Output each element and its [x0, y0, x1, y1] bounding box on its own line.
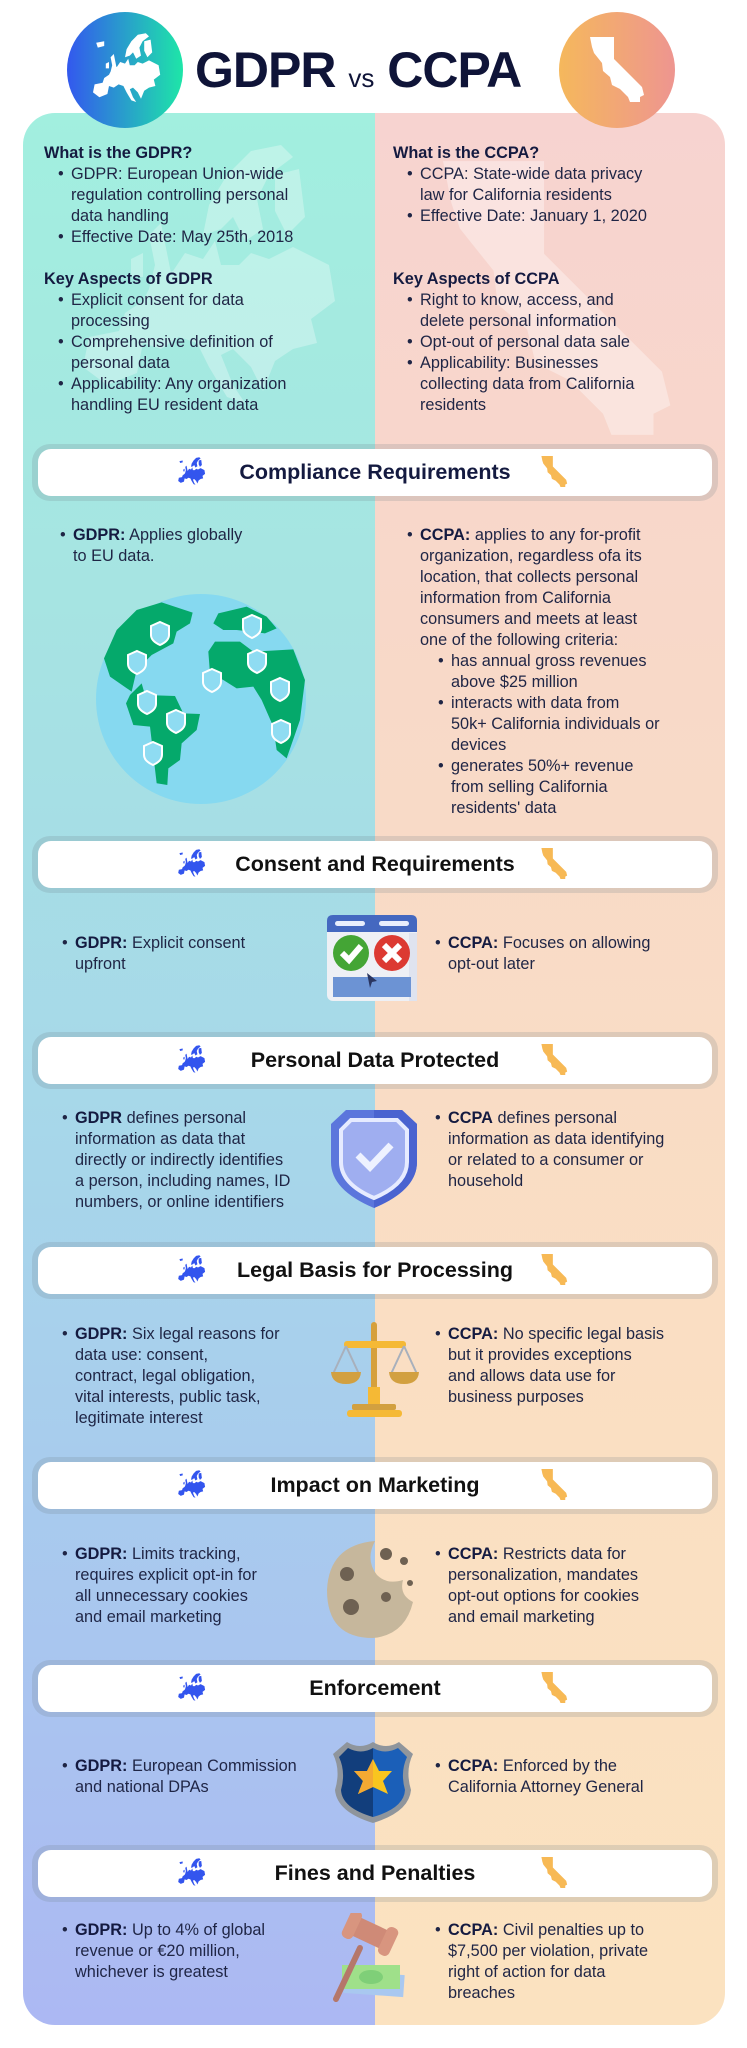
text: what is GDPR: GDPR: European Union-wide: [71, 165, 284, 183]
text: what is CCPA: Effective Date: January 1, 2020: [420, 207, 647, 225]
text: CCPA legal basis: and allows data use for: [448, 1367, 615, 1385]
text: CCPA compliance: 50k+ California individuals or: [451, 715, 660, 733]
text: CCPA fines: breaches: [448, 1984, 515, 2002]
text: GDPR compliance: [60, 526, 242, 565]
text: CCPA compliance: from selling California: [451, 778, 608, 796]
text: CCPA compliance: one of the following criteria:: [420, 631, 618, 649]
icon: EU circle: [67, 12, 183, 128]
text: CCPA enforcement: [436, 1757, 643, 1796]
text: CCPA marketing: opt-out options for cookies: [448, 1587, 639, 1605]
text: what is CCPA: Key Aspects of CCPA: [393, 270, 559, 288]
icon: California circle: [559, 12, 675, 128]
text: GDPR legal basis: GDPR: Six legal reasons for: [75, 1325, 280, 1343]
text: what is CCPA: collecting data from California: [420, 375, 634, 393]
text: GDPR marketing: [62, 1545, 257, 1626]
text: what is CCPA: What is the CCPA?: [393, 144, 539, 162]
icon: scales: [331, 1322, 419, 1417]
text: CCPA legal basis: business purposes: [448, 1388, 584, 1406]
icon: consent window: [327, 915, 417, 1001]
icon: gavel and money: [333, 1913, 405, 2002]
text: GDPR personal data: numbers, or online identifiers: [75, 1193, 284, 1211]
text: what is GDPR: What is the GDPR?: [44, 144, 192, 162]
text: CCPA personal data: information as data identifying: [448, 1130, 664, 1148]
text: GDPR personal data: GDPR defines personal: [75, 1109, 246, 1127]
heading: Impact on Marketing: [32, 1457, 718, 1514]
text: GDPR personal data: information as data that: [75, 1130, 245, 1148]
heading: Consent and Requirements: Consent and Requirements: [235, 852, 515, 876]
text: what is CCPA: Applicability: Businesses: [420, 354, 598, 372]
heading: Fines and Penalties: Fines and Penalties: [275, 1861, 475, 1885]
text: what is GDPR: [44, 144, 293, 414]
text: GDPR personal data: [62, 1109, 290, 1211]
text: GDPR fines: revenue or €20 million,: [75, 1942, 240, 1960]
text: GDPR marketing: and email marketing: [75, 1608, 222, 1626]
heading: Enforcement: [32, 1660, 718, 1717]
icon: police badge: [333, 1742, 413, 1823]
text: CCPA personal data: CCPA defines personal: [448, 1109, 617, 1127]
text: what is CCPA: Opt-out of personal data sale: [420, 333, 630, 351]
text: what is GDPR: Applicability: Any organization: [71, 375, 286, 393]
text: GDPR consent: upfront: [75, 955, 126, 973]
text: GDPR legal basis: [62, 1325, 280, 1427]
text: CCPA compliance: devices: [451, 736, 506, 754]
text: GDPR marketing: all unnecessary cookies: [75, 1587, 248, 1605]
text: GDPR personal data: a person, including names, ID: [75, 1172, 290, 1190]
text: GDPR consent: GDPR: Explicit consent: [75, 934, 245, 952]
text: CCPA consent: CCPA: Focuses on allowing: [448, 934, 650, 952]
text: GDPR compliance: GDPR: Applies globally: [73, 526, 242, 544]
text: CCPA compliance: interacts with data from: [451, 694, 619, 712]
text: CCPA legal basis: CCPA: No specific legal basis: [448, 1325, 664, 1343]
text: what is GDPR: data handling: [71, 207, 169, 225]
text: CCPA compliance: generates 50%+ revenue: [451, 757, 633, 775]
text: CCPA fines: CCPA: Civil penalties up to: [448, 1921, 644, 1939]
text: CCPA consent: opt-out later: [448, 955, 535, 973]
text: what is GDPR: Key Aspects of GDPR: [44, 270, 213, 288]
heading: Personal Data Protected: [32, 1032, 718, 1089]
text: GDPR fines: whichever is greatest: [75, 1963, 228, 1981]
text: CCPA personal data: or related to a consumer or: [448, 1151, 643, 1169]
text: what is GDPR: personal data: [71, 354, 170, 372]
text: CCPA marketing: [436, 1545, 639, 1626]
heading: Compliance Requirements: [32, 444, 718, 501]
text: what is GDPR: Explicit consent for data: [71, 291, 244, 309]
text: what is GDPR: handling EU resident data: [71, 396, 258, 414]
icon: globe with shields: [96, 594, 306, 804]
text: CCPA enforcement: CCPA: Enforced by the: [448, 1757, 617, 1775]
text: GDPR fines: [62, 1921, 265, 1981]
text: CCPA legal basis: [436, 1325, 664, 1406]
text: CCPA fines: $7,500 per violation, private: [448, 1942, 648, 1960]
text: CCPA compliance: [408, 526, 660, 817]
text: GDPR consent: [62, 934, 246, 973]
text: CCPA personal data: household: [448, 1172, 523, 1190]
text: GDPR enforcement: GDPR: European Commission: [75, 1757, 297, 1775]
text: what is GDPR: processing: [71, 312, 150, 330]
text: CCPA compliance: organization, regardless ofa its: [420, 547, 642, 565]
text: CCPA personal data: [436, 1109, 664, 1190]
heading: Legal Basis for Processing: [32, 1242, 718, 1299]
text: CCPA fines: [436, 1921, 648, 2002]
heading: Impact on Marketing: Impact on Marketing: [270, 1473, 480, 1497]
text: CCPA marketing: CCPA: Restricts data for: [448, 1545, 626, 1563]
text: GDPR legal basis: legitimate interest: [75, 1409, 203, 1427]
text: CCPA marketing: personalization, mandates: [448, 1566, 638, 1584]
text: CCPA compliance: information from California: [420, 589, 611, 607]
text: GDPR enforcement: [62, 1757, 297, 1796]
text: GDPR legal basis: vital interests, public task,: [75, 1388, 261, 1406]
icon: cookie: [327, 1541, 413, 1638]
text: GDPR fines: GDPR: Up to 4% of global: [75, 1921, 265, 1939]
text: CCPA compliance: above $25 million: [451, 673, 578, 691]
heading: Personal Data Protected: Personal Data Protected: [251, 1048, 499, 1072]
heading: Fines and Penalties: [32, 1845, 718, 1902]
text: CCPA legal basis: but it provides exceptions: [448, 1346, 632, 1364]
text: CCPA consent: [436, 934, 650, 973]
text: what is CCPA: delete personal information: [420, 312, 616, 330]
text: what is GDPR: Effective Date: May 25th, 2018: [71, 228, 293, 246]
text: CCPA compliance: residents' data: [451, 799, 556, 817]
text: what is CCPA: law for California residents: [420, 186, 612, 204]
heading: Legal Basis for Processing: Legal Basis for Processing: [237, 1258, 513, 1282]
text: GDPR personal data: directly or indirectly identifies: [75, 1151, 283, 1169]
text: what is GDPR: regulation controlling personal: [71, 186, 288, 204]
text: CCPA compliance: has annual gross revenues: [451, 652, 647, 670]
text: what is GDPR: Comprehensive definition of: [71, 333, 273, 351]
text: CCPA compliance: location, that collects personal: [420, 568, 638, 586]
text: what is CCPA: Right to know, access, and: [420, 291, 614, 309]
heading: Consent and Requirements: [32, 836, 718, 893]
text: GDPR marketing: GDPR: Limits tracking,: [75, 1545, 241, 1563]
icon: shield: [331, 1110, 417, 1208]
text: GDPR legal basis: data use: consent,: [75, 1346, 208, 1364]
heading: Enforcement: Enforcement: [309, 1676, 441, 1700]
heading: Compliance Requirements: Compliance Requirements: [239, 460, 511, 484]
text: CCPA compliance: CCPA: applies to any for-profit: [420, 526, 640, 544]
text: CCPA fines: right of action for data: [448, 1963, 605, 1981]
text: GDPR enforcement: and national DPAs: [75, 1778, 209, 1796]
text: GDPR marketing: requires explicit opt-in for: [75, 1566, 257, 1584]
text: what is CCPA: residents: [420, 396, 486, 414]
text: CCPA marketing: and email marketing: [448, 1608, 595, 1626]
title: GDPR vs CCPA: [195, 42, 521, 98]
text: GDPR compliance: to EU data.: [73, 547, 154, 565]
text: CCPA enforcement: California Attorney General: [448, 1778, 643, 1796]
text: GDPR legal basis: contract, legal obligation,: [75, 1367, 255, 1385]
text: what is CCPA: [393, 144, 647, 414]
text: what is CCPA: CCPA: State-wide data privacy: [420, 165, 642, 183]
text: CCPA compliance: consumers and meets at least: [420, 610, 637, 628]
